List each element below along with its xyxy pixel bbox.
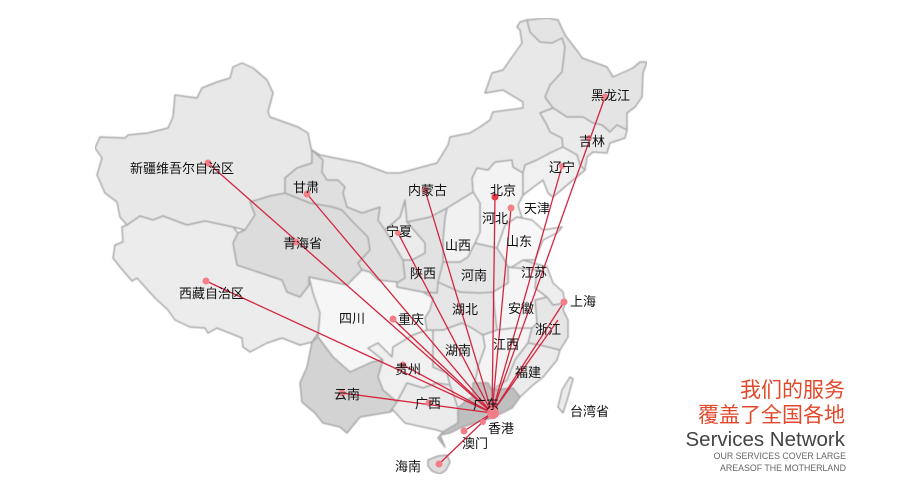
province labels: 山西 [445,238,471,253]
province labels: 湖北 [452,302,478,317]
province labels: 山东 [506,234,532,249]
region: Liaoning [523,147,585,197]
province labels: 澳门 [462,436,488,451]
province labels: 宁夏 [386,224,412,239]
province labels: 黑龙江 [591,88,630,103]
region: Shandong [497,217,562,267]
region: Anhui [493,267,547,330]
province labels: 江苏 [521,265,547,280]
caption heading line 1: 我们的服务 [740,379,845,402]
region: Gansu [285,150,405,283]
province labels: 云南 [334,387,360,402]
region: Guangxi [390,383,458,432]
province labels: 安徽 [508,301,534,316]
province labels: 新疆维吾尔自治区 [130,161,234,176]
region: Hubei [423,282,497,335]
province labels: 四川 [339,311,365,326]
caption title: Services Network [686,428,846,451]
province labels: 西藏自治区 [179,286,244,301]
location dots [202,94,608,468]
province labels: 江西 [493,337,519,352]
province labels: 上海 [570,294,596,309]
region: Guizhou [368,330,450,402]
region: Heilongjiang [527,18,647,132]
region: Guangdong [438,383,520,447]
province labels: 甘肃 [293,180,319,195]
province labels: 贵州 [395,362,421,377]
province labels: 香港 [488,421,514,436]
province labels: 湖南 [445,343,471,358]
region: Hunan [433,323,485,408]
region: Jiangxi [475,328,532,390]
region: Hebei, Beijing, Tianjin [472,160,523,248]
region: Jiangsu [508,260,565,305]
region: Taiwan [558,377,573,413]
region: Sichuan and Chongqing [309,270,433,372]
province labels [130,88,630,474]
province labels: 福建 [515,365,541,380]
region: Fujian [492,343,560,397]
region: Zhejiang [528,297,568,350]
province labels: 广西 [415,396,441,411]
province labels: 河南 [461,268,487,283]
region: Xinjiang [95,63,312,230]
map of China provinces [95,18,647,474]
province labels: 重庆 [398,312,424,327]
province labels: 陕西 [410,266,436,281]
region: Qinghai [233,193,370,297]
region: Hainan [428,455,450,474]
network lines from Guangdong [206,97,605,464]
caption block [686,379,846,473]
region: Shaanxi [397,208,447,293]
caption heading line 2: 覆盖了全国各地 [698,404,845,427]
province labels: 天津 [524,201,550,216]
province labels: 吉林 [579,134,605,149]
province labels: 辽宁 [549,160,575,175]
province labels: 内蒙古 [408,183,447,198]
region: Jilin [540,108,627,170]
province labels: 广东 [473,397,499,412]
province labels: 河北 [482,211,508,226]
region: Tibet [113,216,320,352]
region: Inner Mongolia [312,20,565,230]
caption subtitle line 1: OUR SERVICES COVER LARGE [714,451,846,461]
region: Shanxi [443,192,480,262]
province labels: 北京 [490,183,516,198]
caption subtitle line 2: AREASOF THE MOTHERLAND [720,463,846,473]
province labels: 海南 [395,459,421,474]
region: Ningxia [385,200,425,260]
region: Henan [438,243,508,293]
region: Yunnan [300,337,397,433]
province labels: 浙江 [535,322,561,337]
province labels: 青海省 [283,236,322,251]
province labels: 台湾省 [570,404,609,419]
